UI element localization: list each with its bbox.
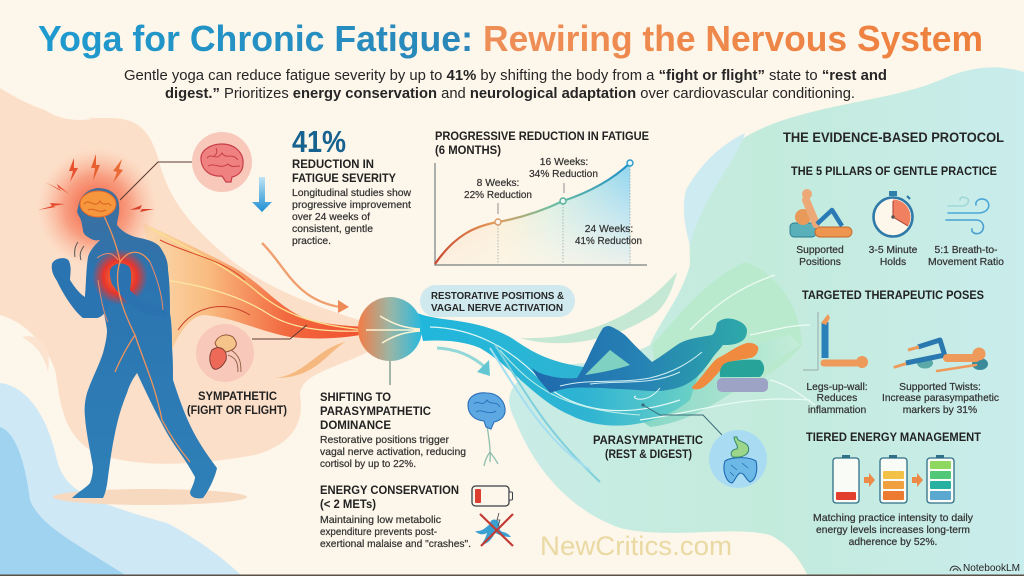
pose labels: markers by 31% xyxy=(903,405,977,416)
stat: 41 percent reduction: consistent, gentle xyxy=(292,224,373,235)
label: parasympathetic: PARASYMPATHETIC xyxy=(593,433,703,447)
icon: crossed out runner xyxy=(475,513,513,546)
icon: medium battery tier xyxy=(880,455,907,503)
line chart: progressive reduction in fatigue: 8 Weeks: xyxy=(477,178,519,189)
label: sympathetic: (FIGHT OR FLIGHT) xyxy=(187,403,287,417)
label: parasympathetic: (REST & DIGEST) xyxy=(605,447,692,461)
stat: 41 percent reduction: 41% xyxy=(292,124,346,159)
pillar labels: 3-5 Minute xyxy=(869,245,918,256)
sympathetic figure xyxy=(37,148,247,505)
stress bolts xyxy=(69,158,78,182)
down arrow xyxy=(252,177,272,212)
pose labels: Legs-up-wall: xyxy=(806,382,868,393)
line chart: progressive reduction in fatigue: (6 MONTHS) xyxy=(435,143,501,157)
intro paragraph: digest.” Prioritizes energy conservation and neurological adaptation over cardiovascular conditioning. xyxy=(165,86,855,102)
icon: blue brain and vagus nerve xyxy=(468,393,505,466)
label pill: restorative positions: VAGAL NERVE ACTIVATION xyxy=(431,303,563,314)
pillar labels: 5:1 Breath-to- xyxy=(935,245,997,256)
heading: five pillars: THE 5 PILLARS OF GENTLE PRACTICE xyxy=(791,164,997,178)
text: shifting to parasympathetic dominance: Restorative positions trigger xyxy=(320,435,450,446)
title xyxy=(38,18,983,59)
text: shifting to parasympathetic dominance: PARASYMPATHETIC xyxy=(320,404,431,418)
sympathetic stream xyxy=(143,223,365,378)
pose: legs up the wall xyxy=(803,312,868,370)
arrow xyxy=(912,473,923,487)
figure body and legs xyxy=(72,188,217,498)
label: sympathetic: SYMPATHETIC xyxy=(198,389,277,403)
intro paragraph: Gentle yoga can reduce fatigue severity by up to 41% by shifting the body from a “fight or flight” state to “rest and xyxy=(124,68,887,84)
text: shifting to parasympathetic dominance xyxy=(320,390,466,470)
panel: evidence-based protocol: THE EVIDENCE-BASED PROTOCOL xyxy=(783,130,1004,145)
reclining figure with bolsters xyxy=(532,318,768,399)
line chart: progressive reduction in fatigue: 41% Reduction xyxy=(575,236,642,247)
line chart: progressive reduction in fatigue: PROGRESSIVE REDUCTION IN FATIGUE xyxy=(435,129,649,143)
text: shifting to parasympathetic dominance: vagal nerve activation, reducing xyxy=(320,447,466,458)
text: energy conservation: expenditure prevents post- xyxy=(320,527,437,538)
stat: 41 percent reduction: progressive improvement xyxy=(292,200,411,211)
pose: supported twist xyxy=(895,340,988,371)
stat: 41 percent reduction: REDUCTION IN xyxy=(292,157,374,171)
label pill: restorative positions xyxy=(420,285,575,317)
arrow: sympathetic to shift xyxy=(262,243,349,313)
raised fist and arm xyxy=(52,258,110,318)
heading: tiered energy: TIERED ENERGY MANAGEMENT xyxy=(806,430,982,444)
line chart: progressive reduction in fatigue xyxy=(435,129,649,265)
text: energy conservation xyxy=(320,483,471,550)
transition node xyxy=(358,297,422,385)
notebooklm mark: NotebookLM xyxy=(963,562,1020,574)
text: energy conservation: (< 2 METs) xyxy=(320,497,376,511)
label: parasympathetic xyxy=(593,433,703,461)
text: shifting to parasympathetic dominance: SHIFTING TO xyxy=(320,390,391,404)
parasympathetic stream xyxy=(417,313,810,482)
icon: adrenal gland callout xyxy=(196,324,307,382)
line chart: progressive reduction in fatigue: 16 Weeks: xyxy=(540,157,588,168)
label: sympathetic xyxy=(187,389,287,417)
intro paragraph xyxy=(124,68,887,102)
line chart: progressive reduction in fatigue: 34% Reduction xyxy=(529,169,598,180)
icon: stopwatch xyxy=(874,191,912,236)
nerves xyxy=(103,214,190,462)
energy text: Matching practice intensity to daily xyxy=(813,513,974,524)
pillar labels xyxy=(796,245,1004,268)
icon: supported position xyxy=(790,189,852,237)
energy text: adherence by 52%. xyxy=(849,537,937,548)
stat: 41 percent reduction: practice. xyxy=(292,236,331,247)
title: Rewiring the Nervous System xyxy=(483,18,983,59)
icon: full battery tier xyxy=(927,455,954,503)
text: energy conservation: Maintaining low metabolic xyxy=(320,515,441,526)
pose labels: Increase parasympathetic xyxy=(882,393,999,404)
stressed brain xyxy=(80,191,116,217)
pose labels: inflammation xyxy=(808,405,866,416)
icon: low battery tier xyxy=(833,455,859,503)
line chart: progressive reduction in fatigue: 24 Weeks: xyxy=(585,224,633,235)
text: energy conservation: ENERGY CONSERVATION xyxy=(320,483,459,497)
icon: low battery xyxy=(472,486,512,506)
heading: targeted poses: TARGETED THERAPEUTIC POSES xyxy=(802,288,984,302)
text: shifting to parasympathetic dominance: DOMINANCE xyxy=(320,418,391,432)
pose labels: Reduces xyxy=(817,393,857,404)
pillar labels: Holds xyxy=(880,257,906,268)
pillar labels: Positions xyxy=(799,257,841,268)
pillar labels: Movement Ratio xyxy=(928,257,1004,268)
energy text: energy levels increases long-term xyxy=(816,525,970,536)
stat: 41 percent reduction: FATIGUE SEVERITY xyxy=(292,171,396,185)
pose labels xyxy=(806,382,999,416)
stat: 41 percent reduction: over 24 weeks of xyxy=(292,212,370,223)
title: Yoga for Chronic Fatigue: xyxy=(38,18,473,59)
energy text xyxy=(813,513,974,548)
arm across chest xyxy=(110,264,167,316)
stat: 41 percent reduction: Longitudinal studies show xyxy=(292,188,412,199)
stress bolts around head xyxy=(38,154,154,212)
pose labels: Supported Twists: xyxy=(899,382,981,393)
arrow: node to brain xyxy=(437,348,490,376)
line chart: progressive reduction in fatigue: 22% Reduction xyxy=(464,190,532,201)
icon: brain callout xyxy=(120,132,252,200)
icon: wind breath xyxy=(946,197,989,234)
label pill: restorative positions: RESTORATIVE POSITIONS & xyxy=(431,291,564,302)
stat: 41 percent reduction xyxy=(292,124,412,247)
arrow xyxy=(864,473,875,487)
text: energy conservation: exertional malaise and "crashes". xyxy=(320,539,471,550)
panel: evidence-based protocol xyxy=(783,130,1004,548)
icon: digestive system callout xyxy=(641,403,767,488)
text: shifting to parasympathetic dominance: cortisol by up to 22%. xyxy=(320,459,416,470)
watermark: NewCritics.com xyxy=(540,531,732,561)
pillar labels: Supported xyxy=(796,245,844,256)
